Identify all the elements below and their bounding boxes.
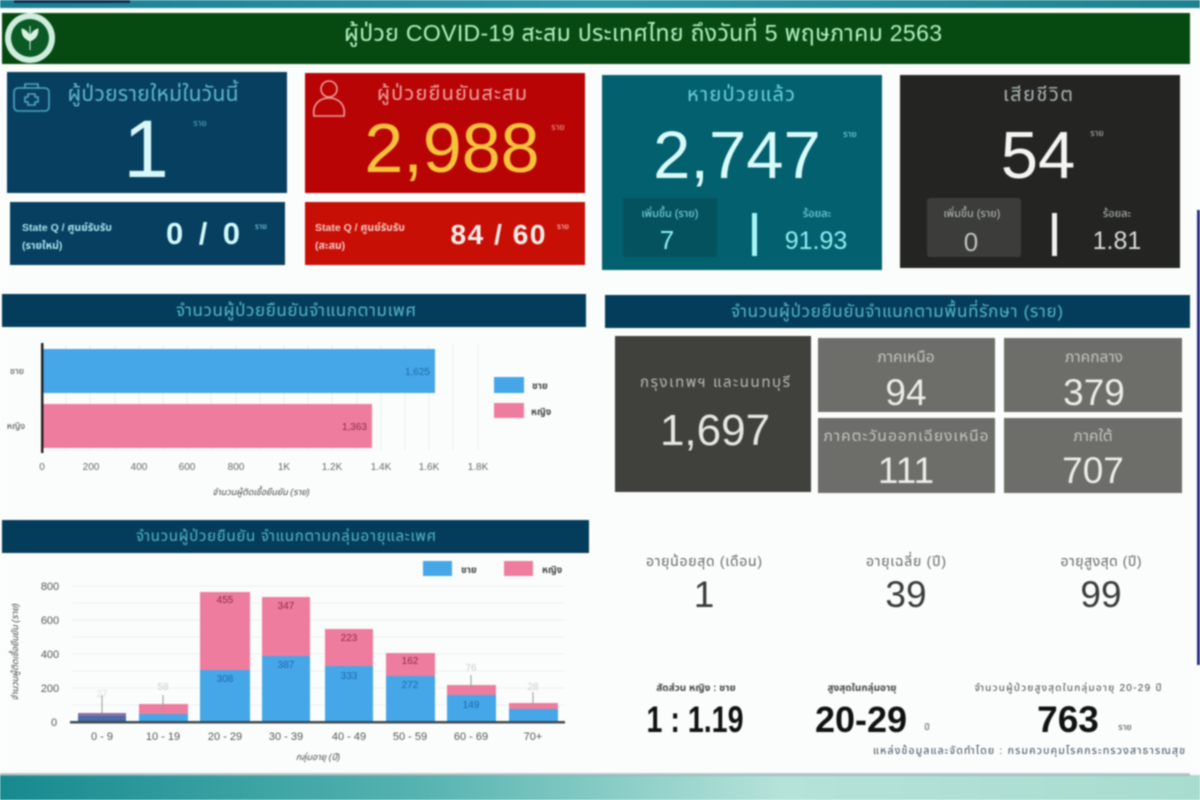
bar chart: cases by gender (7, 343, 552, 498)
label: ผู้ป่วยยืนยันสะสม (377, 82, 527, 106)
bar: 20-29: 308 (217, 674, 234, 685)
stacked bar chart: cases by age and gender (8, 561, 565, 763)
sub stat: percent (1093, 208, 1141, 255)
panel: Northeast (818, 418, 995, 493)
stat: mean age: อายุเฉลี่ย (ปี) (866, 551, 946, 570)
stacked bar chart: cases by age and gender: 200 (41, 683, 59, 695)
unit: ราย (1090, 128, 1104, 138)
bar chart: cases by gender: 1.2K (322, 462, 343, 473)
sub box: increase: เพิ่มขึ้น (ราย) (642, 205, 698, 220)
bar chart: cases by gender: 800 (228, 462, 245, 473)
panel: state quarantine new (10, 202, 285, 265)
value: 1 (123, 104, 169, 195)
bar: 50-59 (386, 653, 435, 722)
sub stat: percent: 91.93 (785, 227, 847, 255)
stat: peak group count: ราย (1118, 722, 1132, 732)
stacked bar chart: cases by age and gender: 0 (51, 717, 57, 729)
stacked bar chart: cases by age and gender: 30 - 39 (269, 731, 303, 743)
stat: peak age group: 20-29 (815, 699, 907, 740)
stat: gender ratio: 1 : 1.19 (646, 699, 744, 740)
stat: youngest age: อายุน้อยสุด (เดือน) (646, 553, 762, 570)
stacked bar chart: cases by age and gender: 20 - 29 (208, 731, 242, 743)
bar chart: cases by gender: 400 (131, 462, 148, 473)
legend: หญิง (542, 565, 563, 576)
heading: cases by age and gender: จำนวนผู้ป่วยยืนยัน จำแนกตามกลุ่มอายุและเพศ (136, 527, 436, 545)
bar chart: cases by gender: ชาย (10, 366, 24, 376)
bar chart: cases by gender: 1K (278, 462, 290, 473)
stat: peak age group: ปี (924, 722, 930, 732)
stat: oldest age: อายุสูงสุด (ปี) (1060, 553, 1142, 570)
stacked bar chart: cases by age and gender: 600 (41, 615, 59, 627)
background: bottom strip (0, 773, 1200, 800)
bar: 10-19: 58 (157, 682, 169, 693)
unit: ราย (193, 118, 207, 128)
bar chart: cases by gender: หญิง (7, 421, 25, 431)
bar: 40-49 (325, 629, 373, 722)
stat: youngest age: 1 (694, 574, 714, 615)
bar: 20-29: 455 (217, 595, 234, 606)
heading: cases by gender: จำนวนผู้ป่วยยืนยันจำแนกตามเพศ (176, 300, 416, 322)
panel: Bangkok and Nonthaburi: กรุงเทพฯ และนนทบุรี (640, 374, 790, 391)
sub stat: percent (785, 208, 847, 255)
bar: 60-69: 76 (465, 663, 477, 674)
icon: ministry logo (5, 13, 55, 63)
bar chart: cases by gender: 1.8K (468, 462, 489, 473)
panel: state quarantine new: State Q / ศูนย์รับรับ (22, 222, 112, 234)
value: 2,988 (364, 109, 540, 187)
bar: 40-49: 223 (341, 633, 358, 644)
bar: 10-19 (139, 682, 188, 722)
divider (1052, 213, 1057, 256)
panel: North: ภาคเหนือ (877, 349, 935, 366)
panel: deaths (900, 75, 1180, 268)
panel: state quarantine new: (รายใหม่) (22, 239, 62, 252)
bar: female: 1,363 (342, 422, 367, 433)
bar chart: cases by gender: 1.6K (419, 462, 440, 473)
stacked bar chart: cases by age and gender: 400 (41, 649, 59, 661)
stacked bar chart: cases by age and gender: 40 - 49 (332, 731, 366, 743)
value: 54 (1001, 118, 1075, 193)
stacked bar chart: cases by age and gender: 60 - 69 (454, 731, 488, 743)
icon: first aid kit (14, 84, 49, 111)
heading: cases by age and gender (2, 520, 589, 553)
panel: Bangkok and Nonthaburi (615, 336, 811, 492)
bar: 30-39 (262, 597, 310, 722)
bar chart: cases by gender: 200 (83, 462, 100, 473)
bar: 30-39: 387 (278, 660, 295, 671)
sub box: increase: เพิ่มขึ้น (ราย) (944, 205, 1000, 220)
sub box: increase (623, 198, 717, 257)
stacked bar chart: cases by age and gender: 0 - 9 (91, 731, 113, 743)
sub box: increase: 7 (660, 225, 674, 255)
bar chart: cases by gender: 1.4K (371, 462, 392, 473)
sub box: increase: 0 (964, 227, 978, 257)
bar chart: cases by gender: 0 (39, 462, 45, 473)
stat: gender ratio: สัดส่วน หญิง : ชาย (656, 681, 736, 694)
stacked bar chart: cases by age and gender: กลุ่มอายุ (ปี) (296, 752, 340, 763)
background: right edge strip (1197, 210, 1200, 665)
bar: male: 1,625 (405, 367, 430, 378)
stat: oldest age: 99 (1080, 574, 1122, 615)
stat: peak group count: จำนวนผู้ป่วยสูงสุดในกลุ่มอายุ 20-29 ปี (974, 681, 1162, 694)
background: top strip (0, 0, 1200, 8)
bar: 30-39: 347 (278, 601, 295, 612)
panel: South: 707 (1062, 450, 1124, 491)
legend: หญิง (531, 407, 552, 418)
panel: Bangkok and Nonthaburi: 1,697 (660, 406, 770, 455)
panel: state quarantine cumulative: ราย (557, 222, 569, 231)
unit: ราย (551, 122, 565, 132)
panel: South (1004, 418, 1182, 493)
unit: ราย (843, 129, 857, 139)
legend (423, 561, 563, 576)
stat: youngest age (646, 553, 762, 615)
stat: mean age (866, 551, 946, 615)
stacked bar chart: cases by age and gender: จำนวนผู้ติดเชื้อยืนยัน (ราย) (8, 603, 21, 701)
label: ผู้ป่วยรายใหม่ในวันนี้ (68, 79, 238, 107)
panel: state quarantine cumulative: 84 / 60 (450, 219, 546, 250)
legend: ชาย (461, 565, 477, 576)
bar: 70+: 28 (527, 682, 539, 693)
icon: person (314, 81, 344, 116)
bar: female (42, 404, 372, 448)
panel: Northeast: ภาคตะวันออกเฉียงเหนือ (824, 428, 988, 445)
bar: 20-29 (200, 592, 250, 722)
source note: แหล่งข้อมูลและจัดทำโดย : กรมควบคุมโรคกระทรวงสาธารณสุข (873, 744, 1185, 757)
sub stat: percent: ร้อยละ (803, 208, 831, 220)
bar: 60-69: 149 (463, 700, 480, 711)
panel: Northeast: 111 (878, 450, 934, 491)
panel: North: 94 (885, 372, 927, 413)
title: ผู้ป่วย COVID-19 สะสม ประเทศไทย ถึงวันที่ 5 พฤษภาคม 2563 (344, 17, 942, 48)
stat: mean age: 39 (885, 574, 927, 615)
sub box: increase (927, 198, 1021, 257)
panel: new cases (7, 72, 287, 195)
stacked bar chart: cases by age and gender: 50 - 59 (393, 731, 427, 743)
bar chart: cases by gender: 600 (179, 462, 196, 473)
stat: oldest age (1060, 553, 1142, 615)
panel: South: ภาคใต้ (1073, 428, 1113, 445)
stat: gender ratio (646, 681, 744, 740)
panel: state quarantine cumulative: (สะสม) (315, 240, 345, 252)
stacked bar chart: cases by age and gender: 10 - 19 (146, 731, 180, 743)
stacked bar chart: cases by age and gender: 800 (41, 581, 59, 593)
divider (752, 213, 757, 256)
bar: 0-9: 27 (96, 689, 108, 700)
stacked bar chart: cases by age and gender: 70+ (524, 731, 542, 743)
heading: cases by gender (2, 294, 586, 327)
panel: state quarantine cumulative (305, 202, 585, 265)
stat: peak group count: 763 (1037, 699, 1099, 740)
bar: 60-69 (447, 663, 496, 722)
heading: cases by treatment area (605, 295, 1190, 328)
bar: 40-49: 333 (341, 671, 358, 682)
heading: cases by treatment area: จำนวนผู้ป่วยยืนยันจำแนกตามพื้นที่รักษา (ราย) (731, 299, 1063, 323)
value: 2,747 (653, 118, 821, 193)
bar chart: cases by gender: จำนวนผู้ติดเชื้อยืนยัน (ราย) (212, 485, 310, 498)
sub stat: percent: ร้อยละ (1103, 208, 1131, 220)
header banner (2, 13, 1190, 64)
bar: 0-9 (78, 689, 126, 722)
bar: 50-59: 162 (402, 656, 419, 667)
label: หายป่วยแล้ว (687, 83, 795, 106)
panel: North (818, 338, 995, 413)
sub stat: percent: 1.81 (1093, 227, 1141, 255)
stat: peak age group: สูงสุดในกลุ่มอายุ (827, 681, 897, 694)
panel: state quarantine cumulative: State Q / ศูนย์รับรับ (315, 222, 405, 234)
bar: 50-59: 272 (402, 680, 419, 691)
stat: peak group count (974, 681, 1162, 740)
legend (494, 377, 552, 418)
legend: ชาย (532, 381, 548, 392)
panel: state quarantine new: ราย (255, 222, 267, 231)
panel: recovered (602, 75, 882, 270)
stat: peak age group (815, 681, 930, 740)
panel: state quarantine new: 0 / 0 (166, 216, 240, 251)
panel: Central: ภาคกลาง (1065, 349, 1123, 366)
panel: Central (1004, 338, 1182, 413)
panel: cumulative cases (305, 73, 585, 193)
label: เสียชีวิต (1003, 84, 1073, 106)
bar: male (42, 349, 435, 393)
panel: Central: 379 (1063, 372, 1125, 413)
bar: 70+ (509, 682, 558, 722)
